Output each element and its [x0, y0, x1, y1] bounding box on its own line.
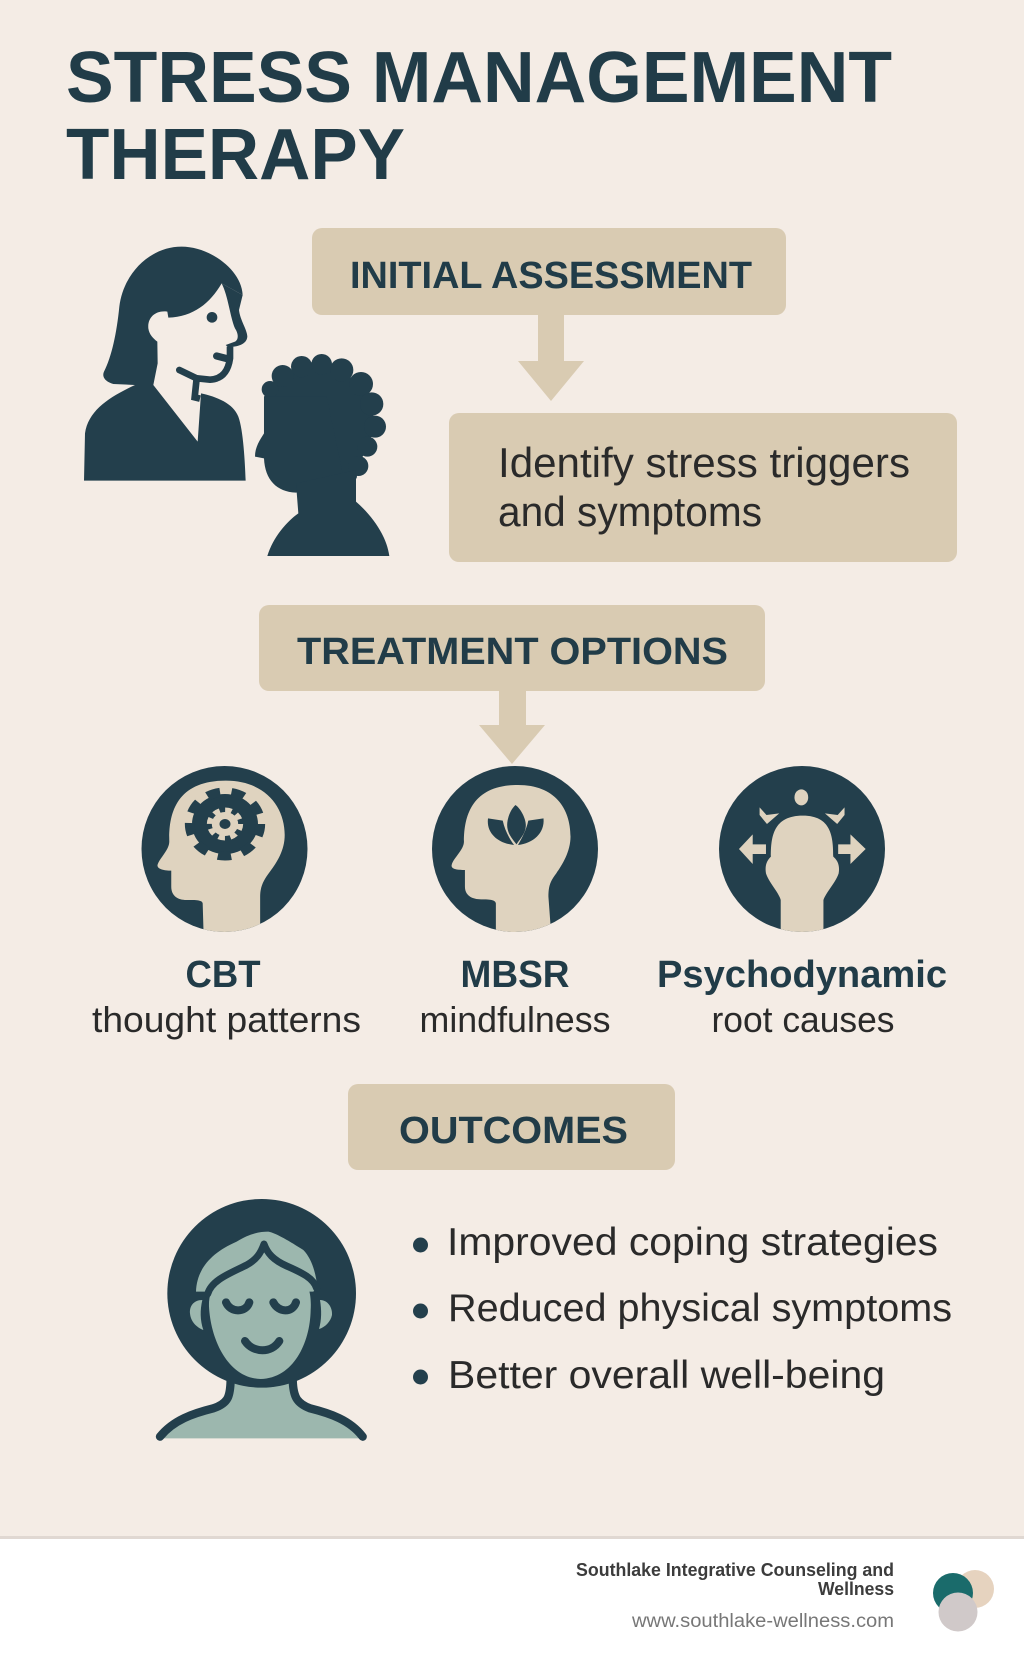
arrow: treatment to options [479, 691, 545, 764]
therapist figure [84, 247, 247, 481]
box: initial assessment: INITIAL ASSESSMENT [350, 255, 752, 297]
bullet item: well-being: Better overall well-being [448, 1354, 885, 1397]
box: treatment options [259, 605, 765, 691]
client figure [255, 354, 389, 556]
list: outcomes [413, 1221, 952, 1397]
title: STRESS MANAGEMENT [66, 38, 892, 118]
arrow: assessment to triggers [518, 314, 584, 401]
icon: therapist and client silhouettes [84, 247, 389, 556]
footer [0, 1536, 1024, 1666]
box: initial assessment [312, 228, 786, 315]
footer logo [933, 1570, 994, 1632]
box: identify triggers: and symptoms [498, 488, 762, 535]
box: outcomes: OUTCOMES [399, 1110, 628, 1152]
label: MBSR: MBSR [460, 954, 570, 996]
label: CBT: thought patterns [92, 999, 361, 1040]
footer organization name: Wellness [818, 1579, 894, 1599]
icon: calm person [160, 1199, 363, 1438]
label: MBSR: mindfulness [420, 999, 610, 1040]
footer url: www.southlake-wellness.com [631, 1611, 894, 1632]
footer organization name [576, 1560, 894, 1599]
bullet item: coping strategies: Improved coping strategies [447, 1221, 938, 1264]
footer organization name: Southlake Integrative Counseling and [576, 1560, 894, 1580]
icon: CBT head with gear [142, 766, 308, 937]
label: CBT: CBT [186, 954, 260, 996]
icon: MBSR head with lotus [432, 766, 598, 937]
icon: psychodynamic head with arrows [719, 766, 885, 937]
box: treatment options: TREATMENT OPTIONS [297, 631, 728, 673]
label: Psychodynamic: root causes [712, 999, 894, 1040]
title: THERAPY [66, 115, 405, 195]
bullet item: physical symptoms: Reduced physical symptoms [448, 1287, 952, 1330]
box: outcomes [348, 1084, 675, 1170]
box: identify triggers: Identify stress triggers [498, 439, 910, 486]
label: Psychodynamic [657, 954, 947, 1040]
label: CBT [92, 954, 361, 1040]
box: identify triggers [449, 413, 957, 562]
label: MBSR [420, 954, 610, 1040]
title [66, 38, 892, 195]
label: Psychodynamic: Psychodynamic [657, 954, 947, 996]
